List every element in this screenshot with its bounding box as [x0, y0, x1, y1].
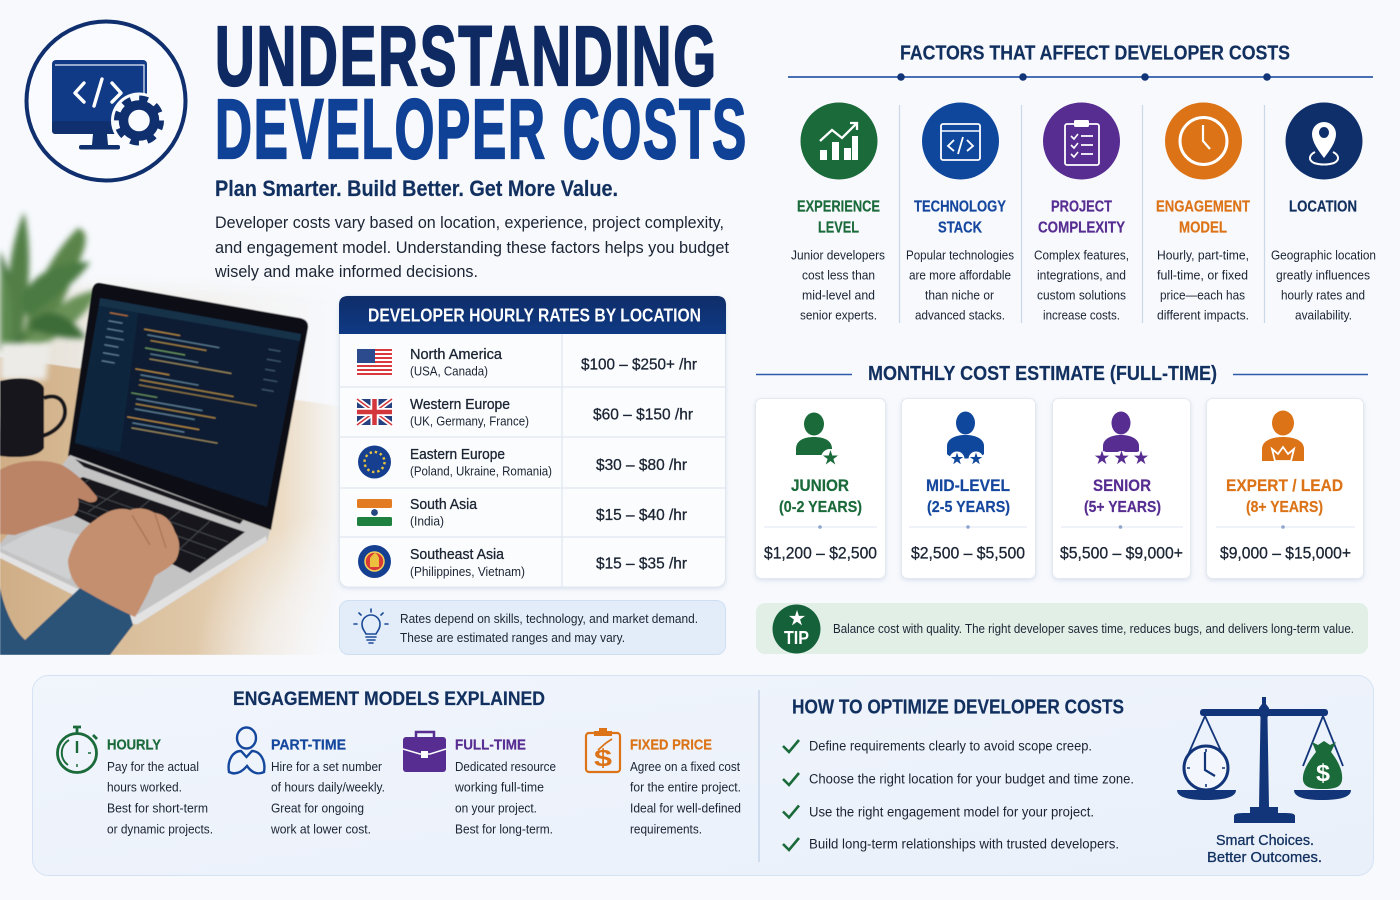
model: fixed price: requirements.: [630, 822, 702, 836]
model: part-time: PART-TIME: [271, 738, 346, 754]
scale caption: [1207, 833, 1322, 866]
callout: rates note: These are estimated ranges and may vary.: [400, 630, 625, 645]
card: mid-level: (2-5 YEARS): [927, 499, 1010, 516]
icon: clipboard checklist: [1043, 102, 1120, 180]
section: engagement models: ENGAGEMENT MODELS EXPLAINED: [233, 688, 545, 710]
factor: engagement model: Hourly, part-time,: [1157, 248, 1249, 262]
row: North America: North America: [410, 347, 503, 363]
icon: growth chart: [800, 102, 878, 180]
callout: rates note: [340, 600, 726, 654]
row: North America: (USA, Canada): [410, 364, 488, 378]
row: South Asia: South Asia: [410, 497, 478, 513]
card: expert / lead: EXPERT / LEAD: [1226, 476, 1343, 495]
flag: India: [357, 499, 392, 526]
card: junior: [756, 398, 886, 578]
model: part-time: work at lower cost.: [270, 822, 371, 836]
factor: location: hourly rates and: [1281, 288, 1365, 302]
factor: location: LOCATION: [1289, 198, 1357, 216]
row: Southeast Asia: [358, 545, 688, 579]
card: expert / lead: (8+ YEARS): [1246, 499, 1323, 516]
model: full-time: Dedicated resource: [455, 760, 556, 774]
model: part-time: [229, 728, 385, 836]
factor: experience level: LEVEL: [818, 220, 859, 236]
factor: project complexity: Complex features,: [1034, 248, 1129, 262]
model: part-time: Hire for a set number: [271, 760, 382, 774]
model: full-time: working full-time: [454, 780, 544, 794]
title: DEVELOPER COSTS: [215, 82, 748, 176]
model: fixed price: for the entire project.: [630, 780, 741, 794]
money bag: [1303, 741, 1342, 789]
factor: experience level: EXPERIENCE: [797, 198, 880, 216]
factor: technology stack: STACK: [938, 220, 982, 236]
card: mid-level: [902, 398, 1036, 578]
scale caption: Better Outcomes.: [1207, 850, 1322, 866]
section: how to optimize: [783, 696, 1134, 852]
row: Eastern Europe: $30 – $80 /hr: [596, 457, 688, 474]
pan left: [1177, 790, 1236, 800]
card: senior: [1052, 398, 1190, 578]
model: part-time: of hours daily/weekly.: [271, 780, 385, 794]
card: mid-level: MID-LEVEL: [926, 476, 1010, 495]
checklist: Define requirements clearly to avoid scope creep.: [809, 738, 1092, 754]
model: part-time: Great for ongoing: [271, 802, 364, 816]
icon: person with two stars: [947, 412, 984, 466]
keyboard: [73, 476, 246, 574]
factor: experience level: [791, 102, 885, 322]
icon: tip badge: TIP: [784, 628, 809, 648]
factor: engagement model: ENGAGEMENT: [1156, 198, 1250, 216]
factor: technology stack: TECHNOLOGY: [914, 198, 1006, 216]
model: fixed price: Agree on a fixed cost: [630, 760, 740, 774]
model: fixed price: FIXED PRICE: [630, 738, 712, 754]
factor: technology stack: [906, 102, 1014, 322]
row: South Asia: $15 – $40 /hr: [596, 507, 688, 524]
row: Southeast Asia: $15 – $35 /hr: [596, 556, 688, 572]
table header: [339, 296, 726, 334]
factor: technology stack: Popular technologies: [906, 248, 1014, 262]
intro paragraph: and engagement model. Understanding these factors helps you budget: [215, 238, 729, 257]
factor: engagement model: different impacts.: [1157, 308, 1249, 322]
section: engagement models: [58, 688, 741, 836]
factor: experience level: cost less than: [802, 268, 875, 282]
factor: experience level: senior experts.: [800, 308, 877, 322]
base: [1234, 807, 1295, 823]
panel: hourly rates table: [339, 296, 726, 587]
row: Southeast Asia: (Philippines, Vietnam): [410, 565, 525, 579]
icon: clock: [1165, 102, 1242, 180]
heading: factors: FACTORS THAT AFFECT DEVELOPER COSTS: [900, 42, 1290, 64]
pan right: [1294, 790, 1351, 800]
icon: person with one star: [796, 412, 839, 467]
factor: project complexity: COMPLEXITY: [1038, 220, 1125, 236]
intro paragraph: Developer costs vary based on location, experience, project complexity,: [215, 213, 724, 232]
row: South Asia: [357, 497, 688, 528]
icon: briefcase: [403, 732, 446, 772]
flag: ASEAN: [358, 545, 391, 578]
intro paragraph: wisely and make informed decisions.: [214, 262, 478, 281]
model: hourly: or dynamic projects.: [107, 822, 213, 836]
sleeve: [0, 587, 133, 655]
laptop screen: [75, 298, 301, 507]
laptop lid: [68, 283, 308, 530]
icon: priced clipboard: $: [594, 745, 613, 772]
checklist: Build long-term relationships with trusted developers.: [809, 836, 1119, 852]
icon: person with three stars: [1094, 412, 1149, 467]
clock: [1184, 746, 1228, 790]
row: North America: $100 – $250+ /hr: [581, 356, 698, 374]
money bag: $: [1316, 760, 1331, 787]
row: North America: [357, 347, 698, 378]
factor: engagement model: price—each has: [1160, 288, 1245, 302]
section: how to optimize: HOW TO OPTIMIZE DEVELOPER COSTS: [792, 696, 1124, 718]
row: Western Europe: $60 – $150 /hr: [593, 406, 694, 424]
model: hourly: hours worked.: [107, 780, 182, 794]
icon: balance scale: [1177, 697, 1351, 823]
factor: engagement model: MODEL: [1179, 220, 1227, 236]
tagline: Plan Smarter. Build Better. Get More Value.: [215, 176, 618, 201]
row: South Asia: (India): [410, 514, 444, 528]
mug: [0, 378, 65, 457]
model: hourly: HOURLY: [107, 738, 161, 754]
factor: location: Geographic location: [1271, 248, 1376, 262]
factor: technology stack: are more affordable: [909, 268, 1011, 282]
icon: tip badge: [772, 604, 820, 654]
icon: stopwatch: [58, 727, 97, 772]
card: senior: (5+ YEARS): [1084, 499, 1161, 516]
checklist: [783, 738, 1134, 852]
icon: light bulb: [354, 609, 388, 643]
model: hourly: [58, 727, 213, 836]
row: Eastern Europe: Eastern Europe: [410, 447, 505, 463]
panel: bottom band: [32, 676, 1374, 876]
heading: monthly cost estimate: MONTHLY COST ESTIMATE (FULL-TIME): [868, 363, 1217, 385]
factor: technology stack: than niche or: [925, 288, 994, 302]
row: Eastern Europe: (Poland, Ukraine, Romania): [410, 464, 552, 478]
factor: project complexity: custom solutions: [1037, 288, 1126, 302]
callout: tip: Balance cost with quality. The right developer saves time, reduces bugs, and delivers long-term value.: [833, 622, 1354, 636]
model: full-time: FULL-TIME: [455, 738, 526, 754]
card: junior: JUNIOR: [791, 476, 849, 495]
factor: project complexity: integrations, and: [1037, 268, 1126, 282]
factor: engagement model: [1156, 102, 1250, 322]
model: hourly: Best for short-term: [107, 802, 208, 816]
model: full-time: Best for long-term.: [455, 822, 553, 836]
model: hourly: Pay for the actual: [107, 760, 199, 774]
factors timeline: [788, 73, 1373, 81]
left hand: [0, 461, 97, 535]
model: fixed price: [586, 728, 741, 836]
callout: tip: [756, 603, 1368, 654]
factor: project complexity: increase costs.: [1043, 308, 1120, 322]
plant pot: [0, 343, 50, 380]
callout: rates note: Rates depend on skills, technology, and market demand.: [400, 611, 698, 626]
card: senior: SENIOR: [1093, 476, 1151, 495]
factor: technology stack: advanced stacks.: [915, 308, 1005, 322]
factor: location: greatly influences: [1276, 268, 1370, 282]
icon: priced clipboard: [586, 728, 620, 772]
row: Western Europe: (UK, Germany, France): [410, 414, 529, 428]
card: senior: $5,500 – $9,000+: [1060, 544, 1183, 562]
laptop base: [0, 455, 270, 624]
factor: location: availability.: [1295, 308, 1352, 322]
card: mid-level: $2,500 – $5,500: [911, 544, 1025, 562]
factor: location: [1271, 102, 1376, 322]
photo: developer typing on laptop: [0, 212, 350, 660]
card: junior: (0-2 YEARS): [779, 499, 862, 516]
icon: person outline: [229, 728, 264, 773]
intro paragraph: [214, 213, 729, 281]
right hand: [68, 508, 179, 617]
card: expert / lead: $9,000 – $15,000+: [1220, 544, 1351, 562]
factor: project complexity: PROJECT: [1051, 198, 1112, 216]
card: junior: $1,200 – $2,500: [764, 544, 877, 562]
scale caption: Smart Choices.: [1216, 833, 1314, 849]
model: full-time: [403, 732, 556, 836]
icon: code window: [922, 102, 999, 180]
title: UNDERSTANDING: [215, 9, 718, 103]
table header: DEVELOPER HOURLY RATES BY LOCATION: [368, 306, 701, 326]
model: fixed price: Ideal for well-defined: [630, 802, 741, 816]
title: [215, 9, 748, 176]
code lines: [100, 311, 282, 444]
icon: map pin: [1286, 102, 1362, 180]
flag: USA: [357, 349, 392, 375]
row: Southeast Asia: Southeast Asia: [410, 547, 505, 563]
desk: [0, 357, 345, 655]
icon: person with crown: [1262, 410, 1304, 461]
row: Western Europe: Western Europe: [410, 397, 510, 413]
factor: experience level: mid-level and: [802, 288, 875, 302]
factor: engagement model: full-time, or fixed: [1157, 268, 1248, 282]
factor: project complexity: [1034, 102, 1129, 322]
card: expert / lead: [1206, 398, 1364, 578]
model: full-time: on your project.: [455, 802, 537, 816]
flag: UK: [357, 399, 392, 425]
logo icon: monitor with code and gear: [26, 22, 186, 180]
checklist: Choose the right location for your budget and time zone.: [809, 772, 1134, 786]
row: Western Europe: [357, 397, 694, 428]
factor: experience level: Junior developers: [791, 248, 885, 262]
flag: EU: [358, 446, 391, 478]
checklist: Use the right engagement model for your project.: [809, 804, 1094, 820]
row: Eastern Europe: [358, 446, 688, 478]
